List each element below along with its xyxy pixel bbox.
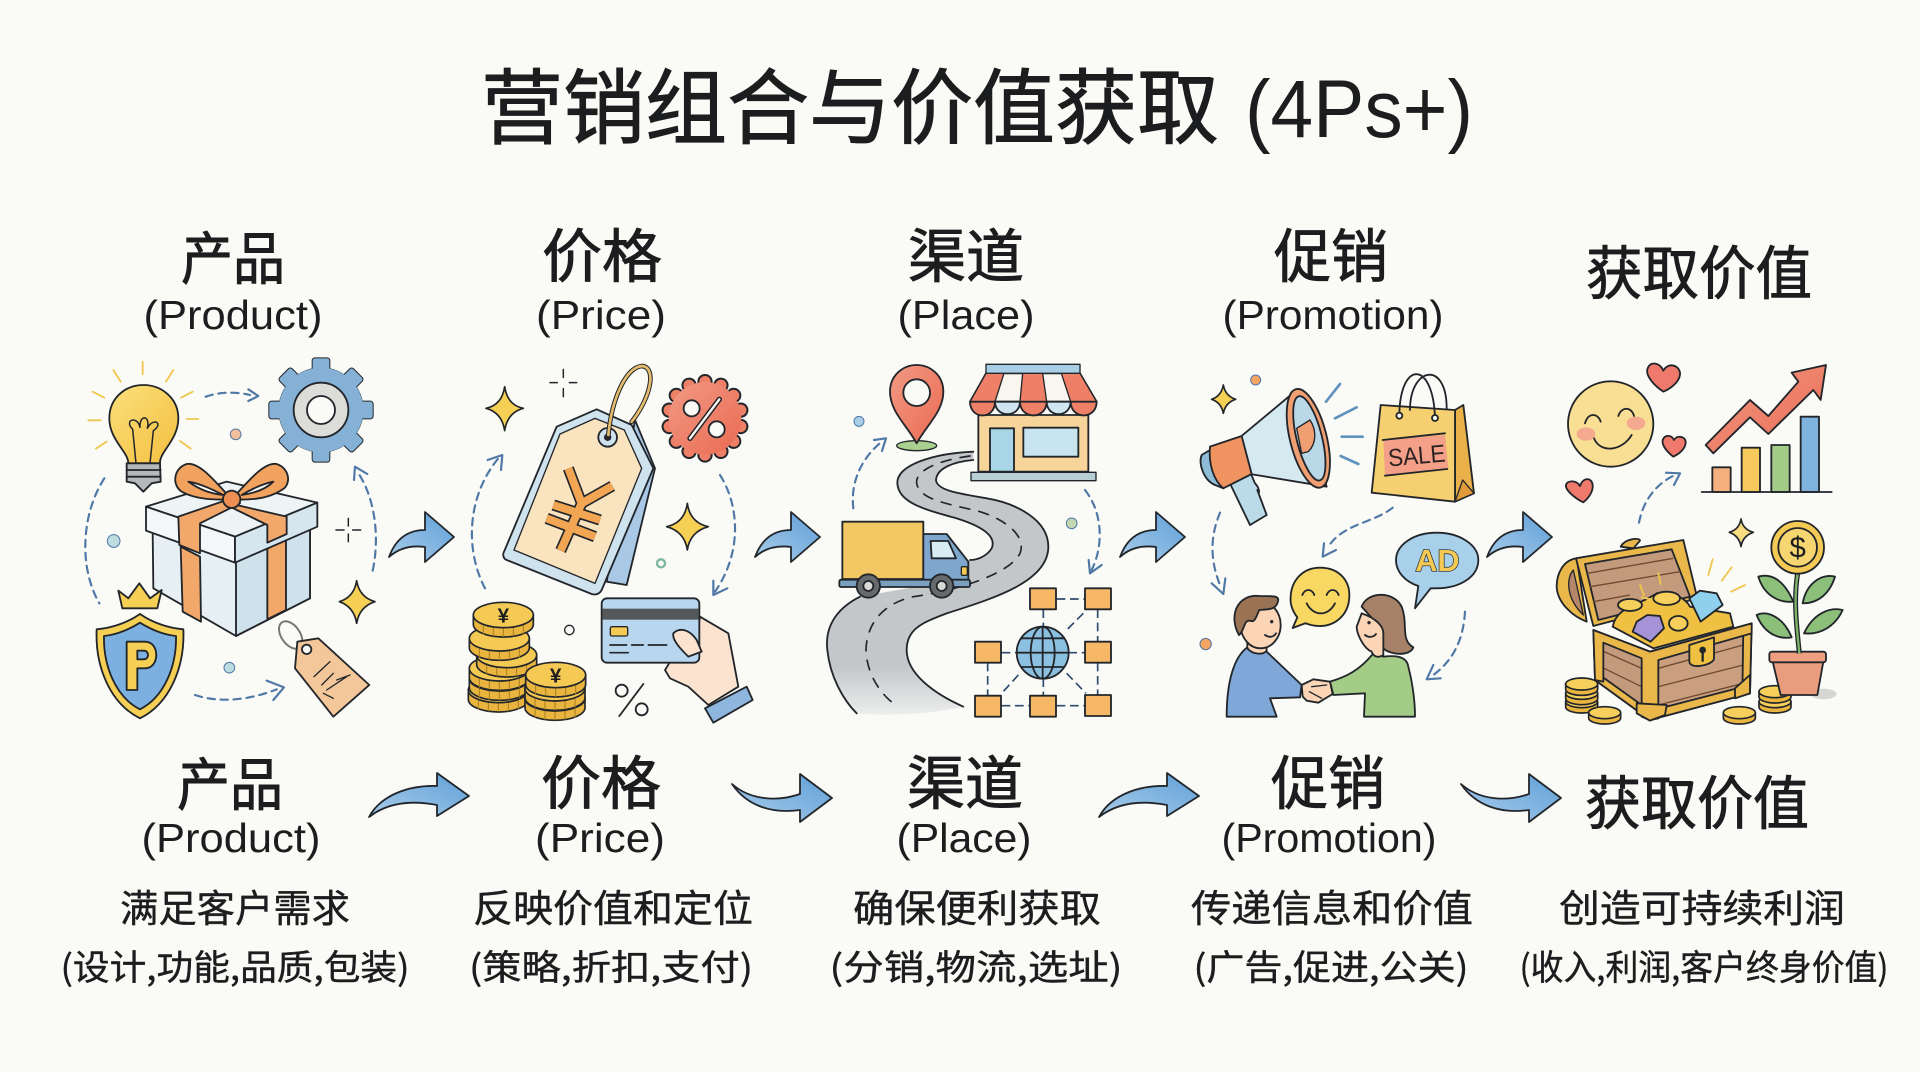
icon: AD speech bubble: AD — [1415, 544, 1459, 578]
panel: price illustration — [468, 366, 753, 723]
description: place: (分销,物流,选址) — [830, 940, 1122, 991]
description: place: 确保便利获取 — [853, 878, 1101, 933]
description: promotion — [1191, 878, 1473, 991]
icon: sale bag: SALE — [1387, 441, 1447, 472]
icon: gift box — [146, 464, 317, 636]
bottom heading: price: 价格 — [541, 737, 661, 821]
flow arrow 2 — [732, 774, 832, 822]
flow arrow 3 — [1099, 773, 1199, 817]
icon: dashed flow arrows — [853, 416, 1102, 573]
bottom heading: product: 产品 — [177, 740, 283, 822]
icon: dashed flow arrows — [85, 389, 376, 700]
icon: network globe — [975, 588, 1111, 717]
bottom heading: price: (Price) — [535, 815, 665, 861]
description: capture value: 创造可持续利润 — [1559, 878, 1845, 933]
icon: treasure chest — [1557, 539, 1752, 721]
description: price: 反映价值和定位 — [473, 878, 753, 933]
icon: AD speech bubble — [1396, 533, 1478, 608]
icon: sparkle and dots — [107, 429, 375, 673]
arrow — [755, 512, 820, 562]
top heading: place — [898, 210, 1034, 338]
icon: price tag — [274, 617, 369, 717]
icon: yen coin stacks: ¥ — [550, 665, 562, 688]
icon: percent badge — [661, 375, 749, 462]
description: price: (策略,折扣,支付) — [469, 940, 753, 991]
bottom heading: capture value: 获取价值 — [1585, 757, 1809, 841]
icon: crown and shield — [97, 583, 183, 718]
panel: product illustration — [85, 358, 376, 718]
description: place — [830, 878, 1122, 991]
arrow — [389, 512, 454, 562]
icon: woman shaking hands — [1302, 595, 1415, 717]
icon: map pin — [890, 365, 943, 451]
description: promotion: (广告,促进,公关) — [1194, 940, 1468, 991]
icon: winding road — [827, 452, 1048, 715]
icon: sparkles — [486, 369, 708, 635]
title: (4Ps+) — [1245, 64, 1473, 155]
top heading: capture value: 获取价值 — [1586, 227, 1812, 311]
icon: yen coin stacks: ¥ — [498, 605, 510, 628]
icon: delivery truck — [839, 522, 970, 598]
icon: money plant — [1757, 521, 1843, 699]
top heading: promotion: 促销 — [1274, 210, 1388, 294]
flow arrow 4 — [1461, 774, 1561, 822]
description: capture value: (收入,利润,客户终身价值) — [1520, 940, 1888, 991]
top heading: product — [144, 214, 322, 338]
description: product: 满足客户需求 — [120, 878, 350, 933]
icon: price tag with yen — [503, 366, 655, 594]
icon: sparkle — [1729, 519, 1753, 547]
icon: hand holding credit card — [602, 598, 753, 723]
top heading: price: (Price) — [536, 292, 666, 338]
top heading: price: 价格 — [542, 210, 662, 294]
bottom heading: price — [535, 737, 665, 861]
icon: smiling face — [1568, 381, 1653, 467]
bottom heading: product — [142, 740, 320, 861]
icon: hearts — [1566, 364, 1686, 502]
bottom heading: promotion — [1222, 737, 1436, 861]
bottom heading: place: 渠道 — [907, 737, 1023, 821]
description: price — [469, 878, 753, 991]
icon: gear — [269, 358, 373, 462]
icon: sparkle and dots — [1200, 375, 1261, 650]
icon: dashed flow arrows — [1212, 508, 1465, 679]
panel: capture value illustration — [1557, 364, 1843, 724]
icon: man shaking hands — [1227, 596, 1302, 717]
icon: dashed flow arrows — [472, 455, 735, 595]
icon: smile speech bubble — [1291, 568, 1349, 628]
bottom heading: place — [896, 737, 1032, 861]
icon: yen coin stacks — [468, 602, 586, 720]
top heading: promotion: (Promotion) — [1222, 292, 1444, 338]
bottom heading: promotion: (Promotion) — [1222, 815, 1436, 861]
icon: sale bag — [1372, 374, 1474, 502]
description: capture value — [1520, 878, 1888, 991]
top heading: place: 渠道 — [908, 210, 1024, 294]
top heading: promotion — [1222, 210, 1444, 338]
top heading: place: (Place) — [898, 292, 1034, 338]
top heading: product: (Product) — [144, 292, 322, 338]
icon: storefront — [970, 364, 1097, 481]
top heading: product: 产品 — [181, 214, 285, 296]
bottom heading: promotion: 促销 — [1271, 737, 1385, 821]
icon: percent sign — [616, 684, 648, 716]
description: promotion: 传递信息和价值 — [1191, 878, 1473, 933]
icon: dashed arrow — [1639, 473, 1680, 523]
icon: megaphone — [1201, 384, 1363, 525]
bottom heading: place: (Place) — [896, 815, 1032, 861]
arrow — [1120, 512, 1185, 562]
icon: growth chart — [1702, 365, 1832, 492]
flow arrow 1 — [369, 773, 469, 817]
panel: promotion illustration — [1200, 374, 1478, 717]
description: product: (设计,功能,品质,包装) — [60, 940, 410, 991]
icon: money plant: $ — [1790, 531, 1806, 564]
title: 营销组合与价值获取 — [481, 42, 1219, 161]
icon: light bulb — [88, 362, 198, 492]
top heading: price — [536, 210, 666, 338]
panel: place illustration — [827, 364, 1111, 717]
description: product — [60, 878, 410, 991]
icon: loose coins — [1566, 678, 1791, 724]
arrow — [1487, 512, 1552, 562]
bottom heading: product: (Product) — [142, 815, 320, 861]
